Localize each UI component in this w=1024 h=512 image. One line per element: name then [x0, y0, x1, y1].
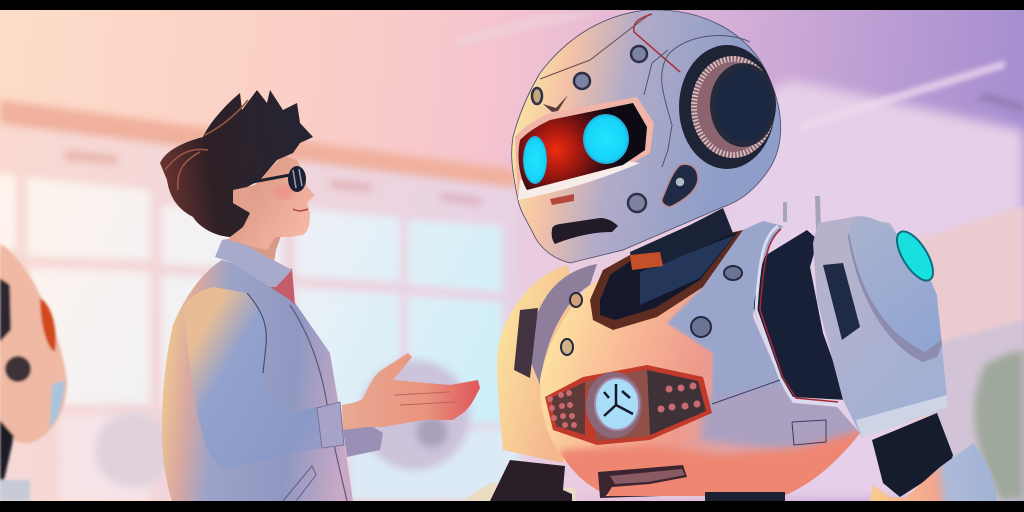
- foreground robot at left edge: [0, 244, 67, 501]
- person: collar: [215, 238, 292, 287]
- robot: shoulder cap rim: [848, 216, 942, 362]
- robot: head red seam: [634, 14, 680, 72]
- robot: arm vent: [823, 263, 860, 340]
- robot: blue plate: [666, 221, 793, 403]
- robot: bottom joint: [705, 492, 785, 501]
- robot: lower slot: [598, 465, 687, 498]
- person: shirt body: [162, 260, 353, 501]
- robot: white strip: [518, 160, 640, 200]
- robot: [462, 10, 997, 510]
- robot: socket rim: [756, 226, 838, 405]
- robot: torso: [540, 221, 860, 496]
- robot: left arm: [497, 265, 590, 463]
- robot: lower plate: [700, 378, 870, 450]
- robot: head top seam: [540, 14, 650, 79]
- person: smile: [293, 209, 308, 211]
- robot: left hand base: [462, 483, 576, 501]
- robot: chest dots: [547, 382, 700, 428]
- person: hand: [342, 353, 480, 430]
- robot: eyes: [583, 114, 629, 164]
- person: placket: [290, 305, 347, 501]
- robot: body bolts: [561, 266, 742, 355]
- letterbox top: [0, 0, 1024, 10]
- background: blurred robots: [95, 360, 470, 488]
- robot: collar: [590, 230, 743, 330]
- robot: torso base: [540, 221, 860, 496]
- robot: visor rim: [515, 97, 654, 200]
- robot: brow mark: [543, 95, 568, 112]
- robot: neck: [630, 208, 733, 270]
- person: cuff: [317, 402, 344, 448]
- robot: antennas: [783, 196, 821, 230]
- robot: shoulder light: [890, 226, 940, 286]
- background: window wall: [0, 100, 525, 501]
- person: far sleeve: [343, 423, 383, 457]
- robot: armor band: [856, 395, 948, 438]
- person: hair strands: [165, 100, 248, 190]
- person: blush: [274, 185, 294, 199]
- person: [160, 90, 480, 501]
- person: sleeve: [183, 287, 344, 468]
- letterbox bottom: [0, 501, 1024, 512]
- robot: right hand: [870, 443, 997, 501]
- robot: body seams: [712, 380, 826, 445]
- robot: shoulder cap: [849, 216, 941, 352]
- robot: lower red glow: [558, 428, 860, 496]
- robot: forearm: [872, 413, 953, 497]
- robot: visor: [518, 103, 647, 190]
- robot: shoulder socket: [753, 230, 847, 400]
- robot: arm vent: [514, 308, 538, 378]
- background: plant: [974, 350, 1024, 500]
- person: glasses: [247, 166, 306, 192]
- background: centre wall: [500, 190, 720, 501]
- robot: chest panel: [545, 365, 712, 445]
- robot: ear speaker: [679, 45, 776, 169]
- robot: cheek socket: [662, 164, 698, 207]
- background: right wall: [720, 80, 1024, 501]
- robot: head: [512, 10, 781, 263]
- robot: mouth: [552, 218, 618, 244]
- robot: head seams: [644, 36, 750, 167]
- person: neck: [228, 215, 285, 275]
- person: face: [227, 155, 315, 250]
- robot: arm band: [530, 264, 597, 385]
- robot: left wrist: [490, 460, 572, 501]
- robot: head bolts: [532, 46, 647, 212]
- background: right side details: [450, 14, 1024, 501]
- person: inner collar: [270, 268, 295, 305]
- person: hair: [160, 90, 313, 237]
- robot: nose slot: [550, 194, 574, 205]
- person: pocket: [283, 466, 316, 501]
- robot: shoulder armor: [813, 217, 948, 438]
- robot: chest dial: [586, 372, 642, 438]
- person: ear: [232, 186, 254, 214]
